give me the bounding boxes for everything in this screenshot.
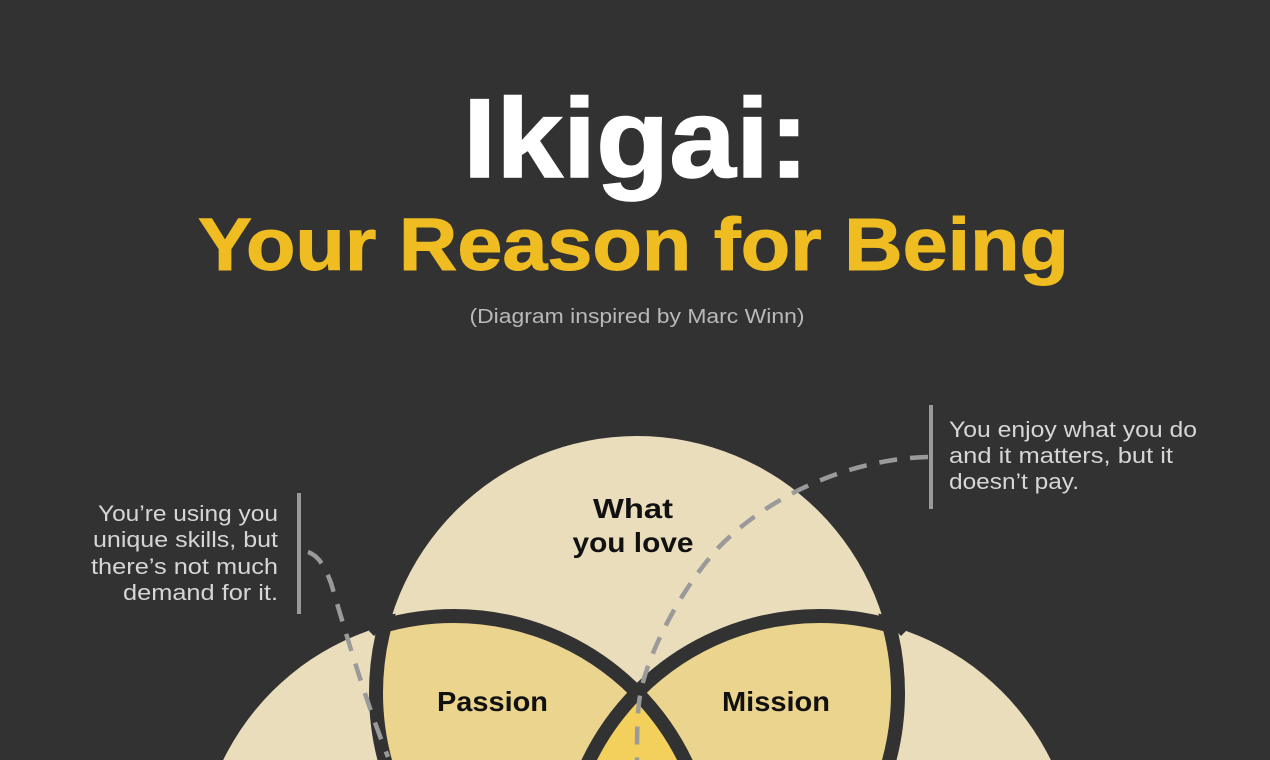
label: mission: Mission [722, 686, 830, 717]
circle: left [197, 616, 711, 760]
callout text: right: and it matters, but it [949, 443, 1173, 468]
callout text: left: there’s not much [91, 554, 278, 579]
callout text: left: demand for it. [123, 580, 278, 605]
label: passion: Passion [437, 686, 548, 717]
outline: top circle lower arc right [878, 614, 905, 760]
lens: passion [383, 623, 627, 760]
callout text: left [91, 501, 278, 605]
circle: right [563, 616, 1077, 760]
junction notch: left [369, 612, 394, 636]
label: what you love: you love [572, 527, 694, 558]
callout bar: right [929, 405, 933, 509]
callout text: left: You’re using you [98, 501, 278, 526]
outline: right circle arc [581, 609, 884, 760]
outline: left circle arc [390, 609, 692, 760]
label: what you love [572, 493, 694, 558]
outline: top circle lower arc left [369, 614, 396, 760]
callout bar: left [297, 493, 301, 614]
lens: mission [647, 623, 891, 760]
callout text: right: doesn’t pay. [949, 469, 1079, 494]
attribution caption: (Diagram inspired by Marc Winn) [470, 306, 804, 328]
callout text: right [949, 417, 1197, 494]
dashed arrow: passion callout [308, 552, 388, 757]
subtitle: Your Reason for Being [198, 203, 1069, 286]
callout text: left: unique skills, but [93, 527, 278, 552]
centre: ikigai [597, 703, 677, 760]
dashed arrow: mission callout [637, 457, 928, 760]
junction notch: right [881, 612, 906, 636]
venn diagram [197, 432, 1077, 760]
label: what you love: What [593, 493, 673, 524]
callout text: right: You enjoy what you do [949, 417, 1197, 442]
circle: what you love [380, 436, 894, 760]
title: Ikigai: [463, 76, 809, 201]
